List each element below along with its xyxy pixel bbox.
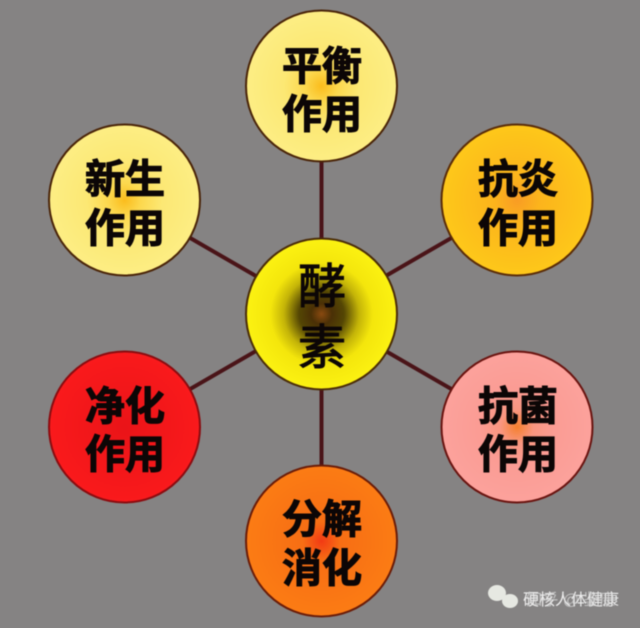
node: antibacterial: 作用 [478,433,558,477]
central node: enzyme: 酵 [298,261,346,314]
node: balance: 平衡 [282,45,362,89]
node: antibacterial: 抗菌 [478,385,558,429]
node: digestion: 分解 [282,498,362,542]
node: anti-inflammatory: 抗炎 [478,158,558,202]
node: regeneration: 新生 [85,158,165,202]
central node: enzyme: 素 [298,322,346,375]
node: anti-inflammatory: 作用 [478,207,558,251]
icon: chat bubbles [488,585,518,608]
node: balance: 作用 [282,93,362,137]
node: regeneration: 作用 [85,207,165,251]
node: digestion [246,466,397,616]
central node: enzyme [246,238,397,390]
node: purification: 净化 [85,385,165,429]
watermark text: 知乎 @ 鉴康 [526,591,616,609]
watermark text: 硬核人体健康 [523,591,619,609]
node: purification [49,352,200,502]
node: balance [246,10,397,162]
node: purification: 作用 [85,433,165,477]
node: regeneration [49,124,200,276]
node: anti-inflammatory [442,124,592,276]
node: digestion: 消化 [282,547,362,591]
connector lines [124,150,517,480]
node: antibacterial [442,352,592,502]
